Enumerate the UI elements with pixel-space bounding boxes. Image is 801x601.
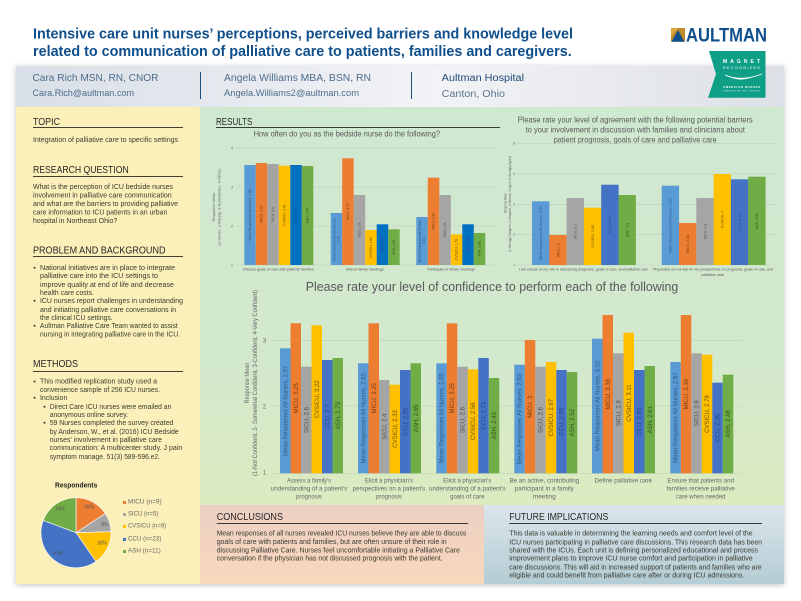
heading: conclusions: CONCLUSIONS bbox=[217, 512, 283, 523]
pie chart: respondents: 40% bbox=[52, 551, 63, 557]
bars: be an active participant: SICU, 2.6 bbox=[539, 406, 545, 433]
panel: future implications bbox=[484, 505, 784, 584]
bars: elicit understanding of goals of care: ASH, 2.43 bbox=[492, 411, 498, 439]
icon: Magnet recognized badge: AMERICAN NURSES bbox=[723, 85, 760, 89]
panel: conclusions bbox=[200, 505, 484, 584]
category labels: prognosis bbox=[376, 494, 402, 501]
bars: define palliative care: SICU, 2.8 bbox=[616, 400, 622, 426]
text block: research question: and what are the barriers to providing palliative bbox=[33, 201, 178, 208]
text block: methods bullets: nurses' involvement in palliative care bbox=[50, 437, 162, 444]
text block: conclusions: discussing Palliative Care. Nurses feel uncomfortable initiating a Palliative Care bbox=[217, 548, 460, 555]
category labels: Ensure that patients and bbox=[667, 478, 735, 485]
bars: attend family meetings: ASH, 1.91 bbox=[392, 239, 396, 255]
bars: unsure of my role: ASH, 3.3 bbox=[626, 223, 630, 237]
text block: problem and background bullets bbox=[34, 265, 183, 339]
panel: authors header band: Angela.Williams2@aultman.com bbox=[224, 88, 359, 98]
bars: be an active participant: MICU, 3 bbox=[528, 395, 534, 418]
title: Intensive care unit nurses’ perceptions, perceived barriers and knowledge level bbox=[33, 26, 573, 42]
bars: participate in family meetings: Mean Responses All Nurses, bbox=[418, 219, 422, 263]
pie legend: SICU (n=5) bbox=[128, 511, 158, 518]
text block: research question: involvement in palliative care communication bbox=[33, 193, 172, 200]
bars: unsure of my role bbox=[532, 185, 636, 265]
text block: research question: What is the perception of ICU bedside nurses bbox=[33, 184, 173, 191]
bars: elicit understanding of goals of care: CCU, 2.73 bbox=[482, 401, 488, 430]
bars: elicit perspectives on prognosis: ASH, 2.65 bbox=[414, 404, 420, 432]
category labels: goals of care bbox=[450, 494, 485, 501]
heading: research question: RESEARCH QUESTION bbox=[33, 165, 129, 176]
bars: physicians do not ask: MICU, 2.38 bbox=[686, 235, 690, 253]
bars: define palliative care: MICU, 3.38 bbox=[606, 378, 612, 409]
bars: elicit perspectives on prognosis: CCU, 2.55 bbox=[403, 407, 409, 436]
category labels: Elicit a physician's bbox=[365, 478, 413, 485]
bars: ensure patients and families receive care: ASH, 2.48 bbox=[726, 410, 732, 438]
heading: future implications: FUTURE IMPLICATIONS bbox=[509, 512, 609, 523]
text block: future implications: care discussions. This will aid in increased support of patients and families who are bbox=[509, 564, 762, 571]
bars: unsure of my role: Mean Responses All Nurses, 3.09 bbox=[539, 206, 543, 260]
bars: assess a family's understanding: CCU, 2.7 bbox=[325, 404, 331, 429]
bars: be an active participant: CCU, 2.55 bbox=[560, 407, 566, 436]
bars: attend family meetings: MICU, 3.75 bbox=[346, 203, 350, 220]
text block: problem and background bullets: palliative care into the ICU settings to bbox=[40, 273, 158, 280]
chart: level of confidence: (1-Not Confident, 2- Somewhat Confident, 3-Confident, 4-Very Confident) bbox=[252, 290, 259, 476]
chart: level of confidence: 2 bbox=[263, 404, 267, 410]
bars: participate in family meetings: MICU, 3.25 bbox=[432, 213, 436, 230]
pie chart: respondents: Respondents bbox=[55, 483, 97, 490]
text block: problem and background bullets: improve quality at end of life and decrease bbox=[40, 282, 174, 289]
panel: authors header band: Angela Williams MBA, BSN, RN bbox=[224, 72, 371, 84]
chart: level of agreement with potential barriers: 3 bbox=[513, 202, 515, 206]
bars: elicit perspectives on prognosis: CVSICU, 2.33 bbox=[393, 409, 399, 448]
bars: discuss goals of care: CCU, 3.57 bbox=[294, 207, 298, 223]
text block: methods bullets: by Anderson, W., et al. (2016) ICU Bedside bbox=[50, 429, 179, 436]
panel: authors header band: Aultman Hospital bbox=[442, 73, 524, 84]
bars: attend family meetings: SICU, 2.8 bbox=[358, 223, 362, 237]
chart: level of confidence: 3 bbox=[263, 338, 267, 344]
bars: be an active participant: CVSICU, 2.67 bbox=[549, 398, 555, 437]
chart: level of agreement with potential barriers: palliative care bbox=[701, 273, 724, 277]
chart: level of confidence: Response Mean bbox=[244, 362, 251, 404]
title bbox=[33, 26, 573, 60]
bars: ensure patients and families receive care: CCU, 2.36 bbox=[716, 413, 722, 442]
text block: research question: hospital in Northeast Ohio? bbox=[33, 218, 117, 225]
text block: methods bullets: 59 Nurses completed the survey created bbox=[50, 420, 173, 427]
chart: how often do you as the bedside nurse: 3 bbox=[231, 184, 234, 190]
chart: level of agreement with potential barriers: Physicians do not ask for my perspectives on prognosis, goals of care, and bbox=[653, 268, 773, 272]
text block: problem and background bullets: nursing in integrating palliative care in the ICU. bbox=[40, 332, 180, 339]
chart: how often do you as the bedside nurse: Participate in family meetings bbox=[427, 267, 475, 272]
chart: how often do you as the bedside nurse: Attend family meetings bbox=[346, 267, 384, 272]
bars: physicians do not ask: CCU, 3.83 bbox=[738, 214, 742, 231]
text block: problem and background bullets: and initiating palliative care conversations in bbox=[40, 307, 176, 314]
chart: level of agreement with potential barriers bbox=[504, 116, 777, 277]
chart: level of agreement with potential barriers: I am unsure of my role in discussing prognosis, goals of care, and palliative care bbox=[519, 268, 648, 272]
chart: how often do you as the bedside nurse bbox=[211, 130, 495, 272]
text block: methods bullets: convenience sample of 256 ICU nurses. bbox=[40, 387, 160, 394]
bars: physicians do not ask: SICU, 3.2 bbox=[703, 224, 707, 239]
chart title: barriers bbox=[518, 116, 753, 145]
bars: elicit perspectives on prognosis: MICU, 3.25 bbox=[372, 382, 378, 413]
text block: problem and background bullets: ICU nurses report challenges in understanding bbox=[40, 298, 183, 305]
chart: level of agreement with potential barriers: 4 bbox=[513, 172, 515, 176]
chart: level of agreement with potential barriers: 5 bbox=[513, 142, 515, 146]
text block: future implications: shared with the ICUs. Each unit is defining personalized educational and process bbox=[509, 547, 758, 554]
text block: problem and background bullets: the clinical ICU settings. bbox=[40, 315, 113, 322]
bars: discuss goals of care: SICU, 3.6 bbox=[271, 207, 275, 222]
bars: attend family meetings: CCU, 2.05 bbox=[381, 237, 385, 253]
bars: elicit understanding of goals of care: MICU, 3.25 bbox=[450, 382, 456, 413]
icon: Magnet recognized badge bbox=[708, 51, 766, 98]
chart title: how often: How often do you as the bedside nurse do the following? bbox=[254, 130, 441, 139]
panel: results bbox=[200, 107, 784, 505]
bars: ensure patients and families receive care: Mean Responses All Nurses, 2.67 bbox=[674, 372, 680, 463]
chart: level of agreement with potential barriers: 2 bbox=[513, 233, 515, 237]
bars: elicit perspectives on prognosis bbox=[358, 323, 421, 473]
bars: define palliative care: CVSICU, 3.11 bbox=[627, 384, 633, 422]
bars: discuss goals of care: Mean Responses All Nurses, 3.58 bbox=[248, 189, 252, 241]
chart: how often do you as the bedside nurse: Response Mean bbox=[211, 192, 216, 222]
category labels: participant in a family bbox=[515, 486, 575, 493]
chart: level of confidence: 1 bbox=[263, 470, 267, 476]
category labels: families receive palliative bbox=[667, 486, 735, 493]
bars: discuss goals of care bbox=[244, 163, 313, 265]
icon: Magnet recognized badge: MAGNET bbox=[723, 59, 760, 65]
bars: assess a family's understanding: SICU, 2.6 bbox=[304, 406, 310, 433]
heading: results: RESULTS bbox=[216, 117, 253, 128]
panel: authors header band: Canton, Ohio bbox=[442, 89, 505, 100]
panel: authors header band: Cara Rich MSN, RN, CNOR bbox=[32, 72, 159, 84]
chart: level of confidence bbox=[244, 279, 742, 501]
category labels: Define palliative care bbox=[595, 478, 652, 485]
bars: participate in family meetings: CVSICU, 1.78 bbox=[455, 239, 459, 260]
bars: elicit perspectives on prognosis: Mean Responses All Nurses, 2.65 bbox=[361, 372, 367, 463]
chart title: confidence: Please rate your level of confidence to perform each of the following bbox=[306, 279, 678, 294]
text block: methods bullets: anonymous online survey. bbox=[50, 412, 128, 419]
panel: authors header band: Cara.Rich@aultman.com bbox=[32, 88, 134, 98]
bars: elicit understanding of goals of care bbox=[436, 323, 499, 473]
bars: be an active participant: ASH, 2.52 bbox=[570, 408, 576, 436]
pie chart: respondents: 9% bbox=[101, 522, 109, 528]
panel: authors header band bbox=[16, 66, 784, 107]
chart: how often do you as the bedside nurse: Discuss goals of care with patients' families bbox=[243, 267, 314, 272]
chart: how often do you as the bedside nurse: 1 bbox=[231, 262, 234, 268]
category labels bbox=[271, 478, 735, 501]
text block: methods bullets bbox=[34, 379, 182, 461]
bars: physicians do not ask: Mean Responses All Nurses, 3.62 bbox=[669, 198, 673, 252]
bars: physicians do not ask bbox=[662, 174, 766, 265]
chart title: barriers: Please rate your level of agreement with the following potential barriers bbox=[518, 116, 753, 125]
category labels: meeting bbox=[533, 494, 556, 501]
bars: unsure of my role: MICU, 2 bbox=[556, 243, 560, 257]
bars: assess a family's understanding bbox=[280, 323, 343, 473]
bars: attend family meetings: CVSICU, 1.89 bbox=[369, 237, 373, 258]
bars: be an active participant: Mean Responses All Nurses, 2.63 bbox=[518, 373, 524, 464]
pie legend: CCU (n=23) bbox=[128, 536, 161, 543]
bars: participate in family meetings bbox=[416, 178, 485, 265]
category labels: understanding of a patient's bbox=[271, 486, 347, 493]
text block: methods bullets: communication: A multicenter study. J pain bbox=[50, 445, 182, 452]
chart: how often do you as the bedside nurse: (1-Never, 2-Rarely, 3-Sometimes, 4-Often) bbox=[216, 168, 222, 246]
category labels: Elicit a physician's bbox=[443, 478, 491, 485]
text block: research question: care information to ICU patients in an urban bbox=[33, 209, 167, 216]
icon: Magnet recognized badge: CREDENTIALING CENTER bbox=[723, 90, 761, 92]
bars: ensure patients and families receive care: CVSICU, 2.78 bbox=[705, 394, 711, 433]
text block: conclusions: goals of care with patients and families, but are often unsure of their role in bbox=[217, 539, 447, 546]
category labels: understanding of a patient's bbox=[429, 486, 506, 493]
bars: assess a family's understanding: CVSICU, 3.22 bbox=[315, 380, 321, 418]
panel: left column bbox=[16, 107, 200, 584]
pie chart: respondents: 19% bbox=[55, 506, 66, 512]
text block: problem and background bullets: health care costs. bbox=[40, 290, 94, 297]
text block: future implications bbox=[509, 531, 762, 580]
chart: how often do you as the bedside nurse: 4 bbox=[231, 146, 234, 150]
text block: problem and background bullets: Aultman Palliative Care Team wanted to assist bbox=[40, 323, 178, 330]
text block: future implications: eligible and could benefit from palliative care after or during ICU admissions. bbox=[509, 573, 744, 580]
bars: attend family meetings: 2.33 bbox=[336, 236, 340, 242]
bars: physicians do not ask: ASH, 3.91 bbox=[755, 213, 759, 229]
text block: future implications: improvement plans to improve ICU nurse comfort and participation in palliative bbox=[509, 556, 753, 563]
bars: elicit perspectives on prognosis: SICU, 2.4 bbox=[382, 413, 388, 440]
text block: conclusions bbox=[217, 531, 467, 563]
bars: participate in family meetings: CCU, 2.05 bbox=[466, 237, 470, 253]
text block: topic: Integration of palliative care to specific settings bbox=[33, 137, 178, 144]
pie chart: respondents: 16% bbox=[97, 540, 107, 546]
bars: be an active participant bbox=[514, 340, 577, 473]
category labels: Be an active, contributing bbox=[509, 478, 580, 485]
chart: how often do you as the bedside nurse: 2 bbox=[231, 224, 234, 228]
bars: assess a family's understanding: MICU, 3.25 bbox=[294, 382, 300, 413]
bars: elicit understanding of goals of care: SICU, 2.6 bbox=[461, 406, 467, 433]
bars: define palliative care: Mean Responses All Nurses, 3.02 bbox=[595, 360, 601, 451]
bars: ensure patients and families receive care: MICU, 3.38 bbox=[684, 378, 690, 409]
bars: unsure of my role: SICU, 3.2 bbox=[574, 224, 578, 239]
text block: methods bullets: This modified replication study used a bbox=[40, 379, 157, 386]
bars: attend family meetings: Mean Responses All Nurses, bbox=[332, 217, 336, 261]
bars: attend family meetings bbox=[331, 158, 400, 265]
heading: problem and background: PROBLEM AND BACKGROUND bbox=[33, 245, 166, 256]
bars: discuss goals of care: ASH, 3.55 bbox=[306, 208, 310, 223]
pie chart: respondents bbox=[41, 483, 111, 568]
bars: define palliative care: ASH, 2.61 bbox=[648, 405, 654, 433]
text block: conclusions: conversation if the physician has not discussed prognosis with the patient. bbox=[217, 556, 443, 563]
pie legend: CVSICU (n=9) bbox=[128, 523, 166, 530]
text block: methods bullets: Inclusion bbox=[40, 395, 67, 402]
chart: level of agreement with potential barriers: (1-Strongly Disagree, 2-Disagree, 3-Neutral, 4-Agree, 5-Strongly Agree) bbox=[508, 156, 512, 252]
text block: conclusions: Mean responses of all nurses revealed ICU nurses believe they are able to discuss bbox=[217, 531, 467, 538]
text block: methods bullets: Direct Care ICU nurses were emailed an bbox=[50, 404, 171, 411]
heading: topic: TOPIC bbox=[33, 117, 60, 128]
chart title: barriers: patient prognosis, goals of care and palliative care bbox=[554, 136, 717, 145]
bars: unsure of my role: CVSICU, 2.89 bbox=[591, 225, 595, 248]
bars: discuss goals of care: MICU, 3.63 bbox=[260, 205, 264, 223]
pie chart: respondents: 16% bbox=[84, 504, 95, 510]
icon: Magnet recognized badge: RECOGNIZED bbox=[723, 66, 760, 70]
bars: define palliative care bbox=[592, 315, 655, 473]
bars: elicit understanding of goals of care: CVSICU, 2.56 bbox=[471, 402, 477, 440]
bars: ensure patients and families receive care bbox=[670, 315, 733, 473]
bars: participate in family meetings: 2.23 bbox=[422, 238, 426, 244]
text block: future implications: ICU nurses participating in palliative care discussions. This research data has been bbox=[509, 539, 762, 546]
bars: participate in family meetings: SICU, 2.8 bbox=[443, 223, 447, 237]
text block: problem and background bullets: National initiatives are in place to integrate bbox=[40, 265, 175, 272]
text block: future implications: This data is valuable in determining the learning needs and comfort level of the bbox=[509, 531, 753, 538]
bars: participate in family meetings: ASH, 1.82 bbox=[478, 241, 482, 257]
chart: level of agreement with potential barriers: Response Mean bbox=[504, 193, 508, 213]
bars: unsure of my role: CCU, 3.65 bbox=[608, 217, 612, 233]
chart: level of agreement with potential barriers: 1 bbox=[513, 263, 515, 267]
bars: physicians do not ask: CVSICU, 4 bbox=[721, 211, 725, 228]
category labels: Assess a family's bbox=[287, 478, 331, 485]
text block: research question bbox=[33, 184, 178, 225]
logo: Aultman: AULTMAN bbox=[686, 26, 767, 47]
bars: discuss goals of care: CVSICU, 3.56 bbox=[283, 205, 287, 226]
heading: methods: METHODS bbox=[33, 359, 78, 370]
bars: ensure patients and families receive care: SICU, 2.8 bbox=[695, 400, 701, 426]
bars: define palliative care: CCU, 2.55 bbox=[637, 407, 643, 436]
bars: elicit understanding of goals of care: Mean Responses All Nurses, 2.65 bbox=[440, 372, 446, 463]
text block: methods bullets: symptom manage. 51(3) 589-596.e2. bbox=[50, 454, 160, 461]
title: related to communication of palliative care to patients, families and caregivers. bbox=[33, 43, 572, 60]
bars: assess a family's understanding: ASH, 2.73 bbox=[336, 401, 342, 429]
pie legend: ASH (n=11) bbox=[128, 548, 161, 555]
chart title: barriers: to your involvement in discussion with families and clinicians about bbox=[526, 126, 746, 135]
category labels: prognosis bbox=[296, 494, 322, 501]
category labels: care when needed bbox=[676, 494, 726, 501]
pie legend: MICU (n=9) bbox=[128, 499, 162, 506]
category labels: perspectives on a patient's bbox=[353, 486, 425, 493]
bars: assess a family's understanding: Mean Responses All Nurses, 2.87 bbox=[283, 365, 289, 456]
pie legend bbox=[123, 499, 166, 555]
